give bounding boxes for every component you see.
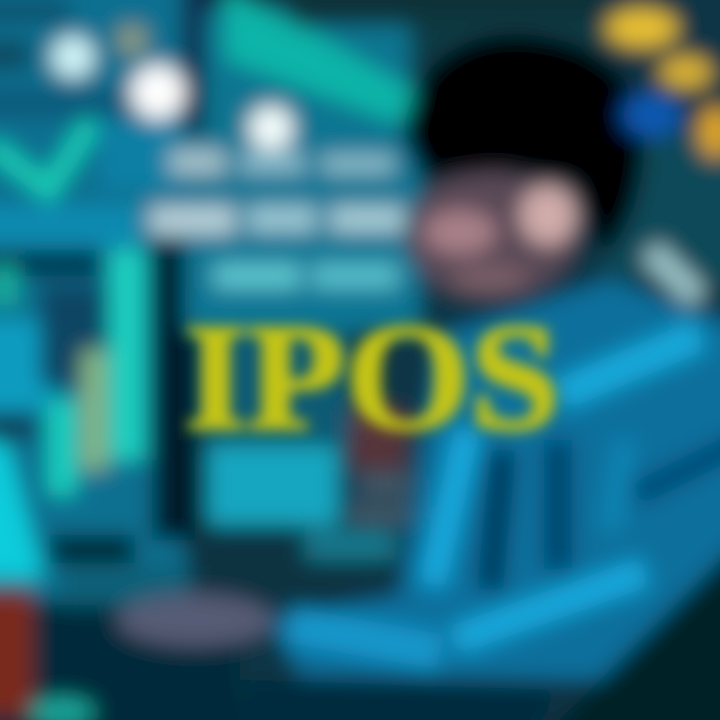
top dark band and right backdrop — [290, 0, 720, 280]
icon: cyan wedge lower left — [0, 435, 44, 578]
person: dark hair — [402, 34, 644, 258]
person: hands on keyboard — [117, 594, 273, 646]
person: face and neck — [350, 173, 575, 470]
person: shirt folds — [290, 335, 720, 652]
icon: teal glow bottom left — [30, 698, 94, 720]
chart: teal line on left screen — [0, 122, 92, 190]
icon: pale streak right — [650, 250, 698, 298]
dark vertical screen divider — [152, 0, 218, 540]
heading: IPOS: IPOS — [184, 293, 560, 461]
chart: rising teal bars — [0, 250, 144, 495]
panel: left trading screen — [0, 0, 240, 720]
text block: blurred headline lines above IPOS — [150, 150, 404, 288]
person: cheek highlight — [424, 185, 576, 291]
icon: yellow and blue lights top right — [606, 9, 720, 158]
icon: red corner block — [0, 590, 32, 715]
icon: glowing white lights — [52, 25, 293, 150]
panel: central screen — [185, 0, 420, 598]
person: blue shirt — [230, 280, 720, 720]
